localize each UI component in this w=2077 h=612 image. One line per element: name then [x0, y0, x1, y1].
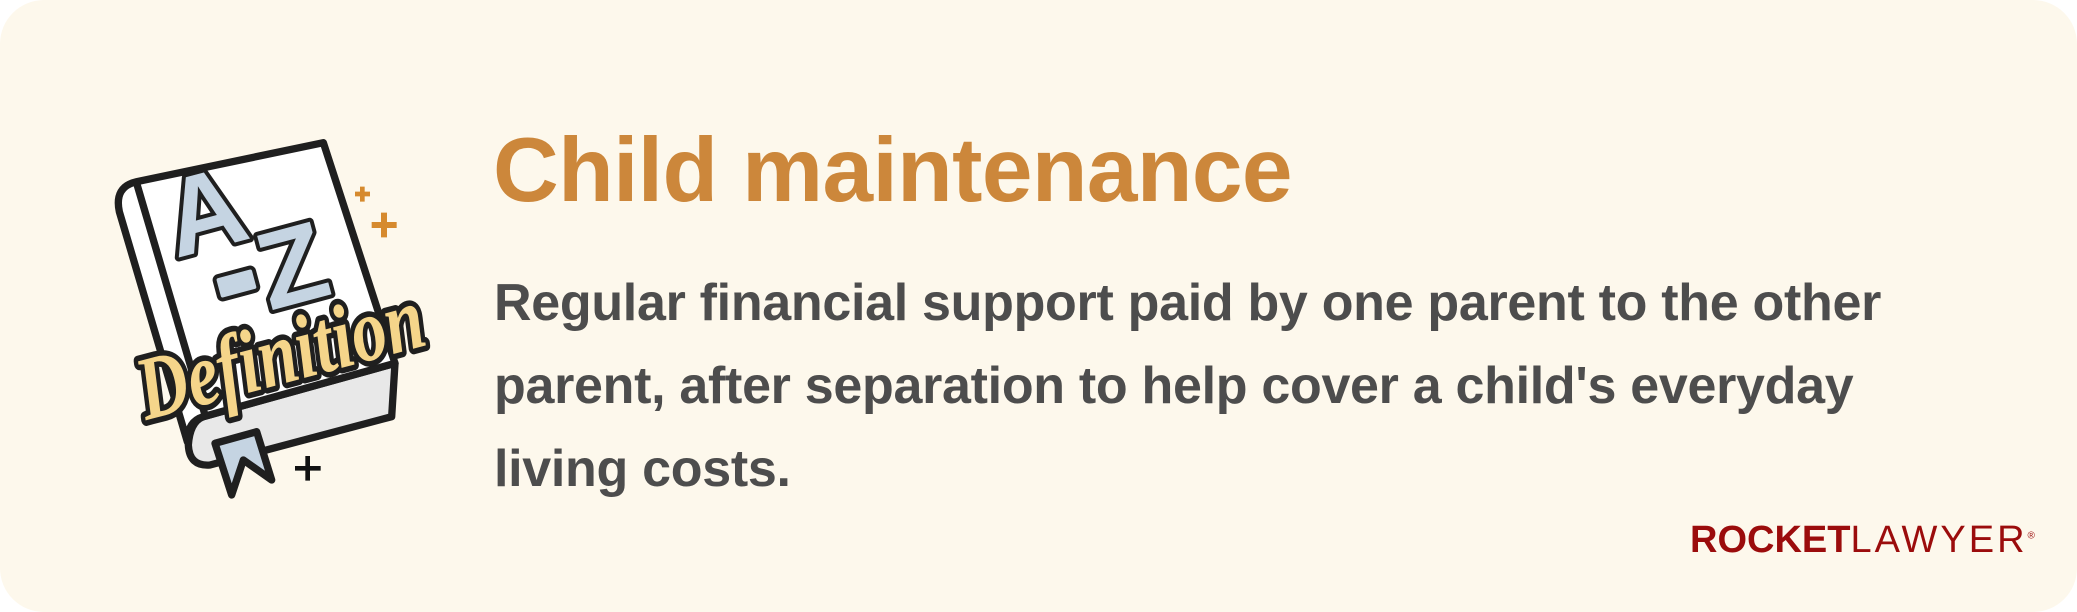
icon: dictionary book: Z — [244, 198, 341, 334]
icon: dictionary book — [114, 139, 435, 499]
logo: Rocket Lawyer: ROCKETLAWYER® — [1690, 519, 2035, 561]
icon: dictionary book: A — [151, 142, 259, 281]
title: Child maintenance — [493, 120, 1292, 221]
text block: definition: Regular financial support paid by one parent to the other parent, after separation to help cover a child's everyday living costs. — [494, 274, 1881, 498]
